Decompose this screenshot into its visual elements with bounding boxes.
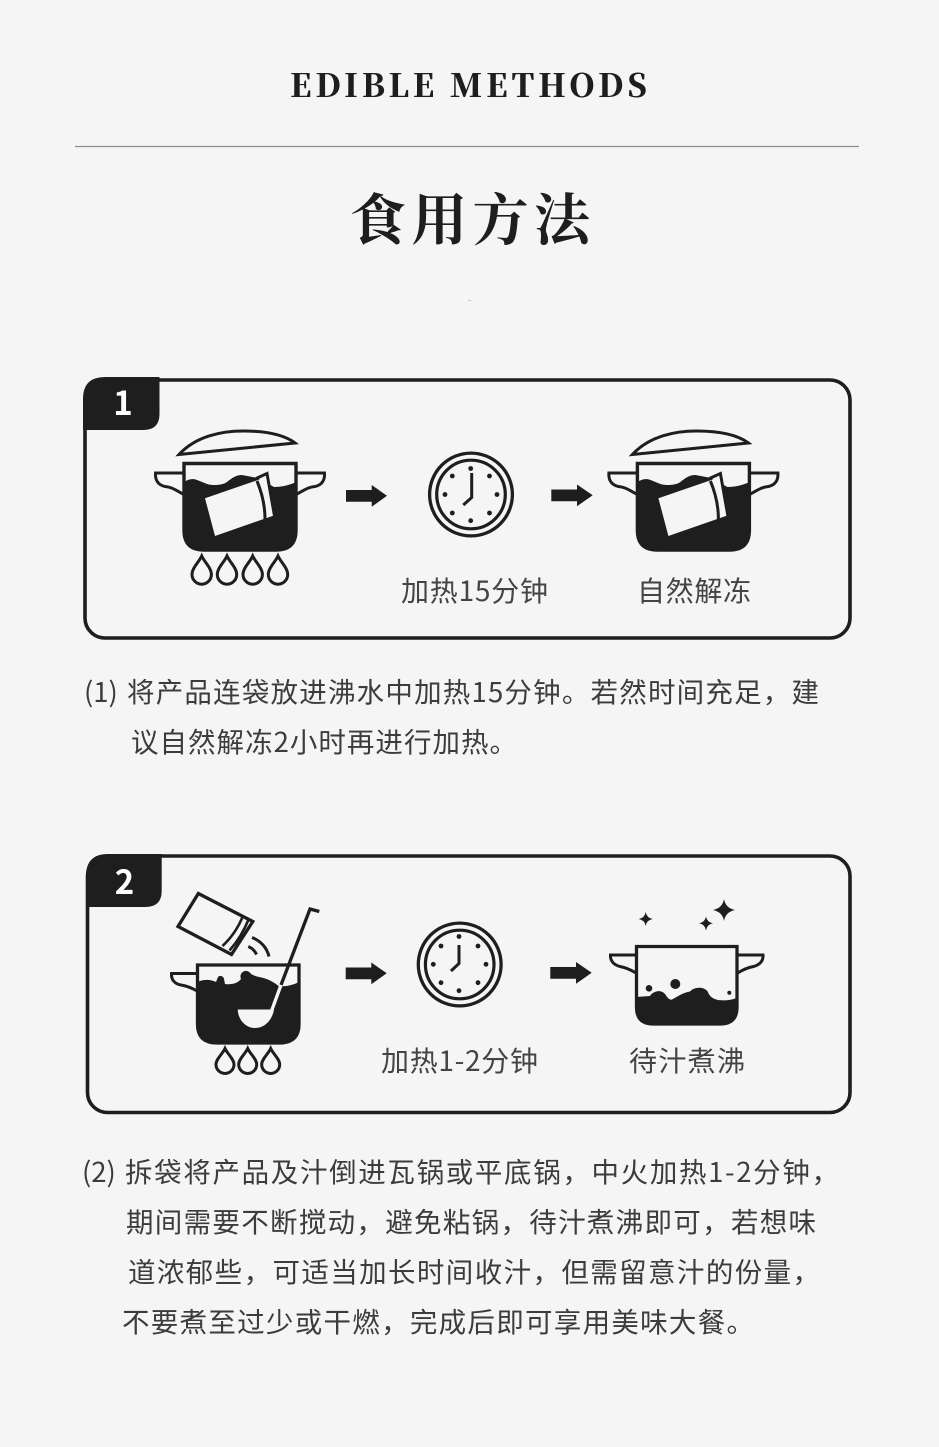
icon: three flames: [216, 1048, 280, 1074]
icon: boiling pot with sparkles: [610, 899, 763, 1024]
text block: step 1 description: [84, 670, 819, 760]
icon: clock: [418, 923, 501, 1006]
panel: step 1: [83, 377, 850, 638]
label: heat 15 minutes: 加热15分钟: [401, 570, 548, 610]
label: heat 1-2 minutes: 加热1-2分钟: [381, 1040, 538, 1080]
text block: step 1 description: (1): [84, 670, 118, 710]
text block: step 2 description: 期间需要不断搅动，避免粘锅，待汁煮沸即可，若想味: [126, 1200, 816, 1240]
icon: four flames: [192, 556, 288, 584]
icon: packet poured into pot with ladle: [171, 894, 319, 1074]
panel: step 2: [86, 854, 850, 1112]
text block: step 2 description: 道浓郁些，可适当加长时间收汁，但需留意汁的份量，: [128, 1250, 820, 1290]
text block: step 2 description: 不要煮至过少或干燃，完成后即可享用美味大餐。: [122, 1300, 754, 1340]
title: Chinese heading: 食用方法: [350, 177, 594, 257]
arrow: [346, 962, 387, 984]
icon: clock: [430, 453, 512, 536]
label: wait for sauce to boil: 待汁煮沸: [629, 1040, 745, 1080]
ladle: [281, 909, 319, 985]
text block: step 2 description: 拆袋将产品及汁倒进瓦锅或平底锅，中火加热1-2分钟，: [125, 1150, 839, 1190]
step 2 number tab: [86, 854, 162, 907]
title: English heading: EDIBLE METHODS: [290, 61, 647, 107]
step 1 number tab: [83, 377, 160, 430]
sparkles: [639, 899, 735, 930]
text block: step 1 description: 将产品连袋放进沸水中加热15分钟。若然时间充足，建: [127, 670, 819, 710]
icon: covered pot cooling: [609, 431, 778, 550]
step 1 number tab: 1: [113, 377, 133, 425]
text block: step 2 description: [82, 1150, 839, 1340]
label: natural thaw: 自然解冻: [637, 570, 751, 610]
step 2 number tab: 2: [115, 856, 134, 904]
text block: step 1 description: 议自然解冻2小时再进行加热。: [131, 720, 517, 760]
arrow: [550, 962, 592, 984]
text block: step 2 description: (2): [82, 1150, 116, 1190]
icon: covered pot on flames with packet: [155, 431, 325, 584]
packet: [178, 894, 253, 954]
arrow: [551, 484, 593, 506]
arrow: [346, 485, 387, 507]
